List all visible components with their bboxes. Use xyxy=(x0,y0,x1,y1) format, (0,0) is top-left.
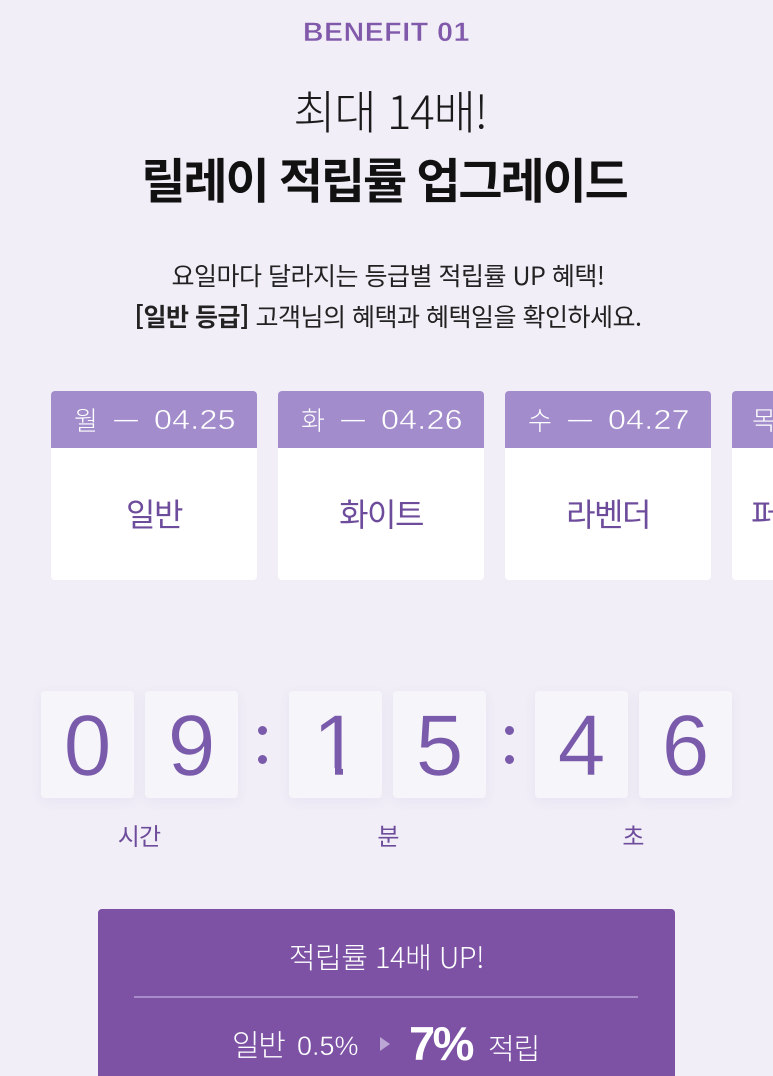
panel: monday card: — xyxy=(114,406,138,433)
title: bold line: 릴레이 적립률 업그레이드 xyxy=(141,142,627,212)
rate heading: 적립률 14배 UP! xyxy=(289,935,484,977)
panel: wednesday card xyxy=(505,391,711,580)
panel: wednesday card: 수 xyxy=(528,401,552,438)
panel: tuesday card: 화 xyxy=(301,401,325,438)
countdown: seconds digit 4: 4 xyxy=(558,698,605,794)
countdown: colon xyxy=(505,726,514,764)
description text xyxy=(135,257,641,334)
panel: wednesday card: 04.27 xyxy=(608,404,690,435)
countdown: seconds digit 6: 6 xyxy=(662,698,709,794)
description text: [일반 등급] 고객님의 혜택과 혜택일을 확인하세요. xyxy=(135,298,641,334)
countdown: minutes digit 5 xyxy=(393,691,486,798)
rate: base percent: 0.5% xyxy=(297,1031,359,1061)
panel: monday card: 04.25 xyxy=(154,404,236,435)
countdown: seconds digit 6 xyxy=(639,691,732,798)
panel: monday card: 일반 xyxy=(126,490,182,536)
countdown: seconds digit 4 xyxy=(535,691,628,798)
panel: rate upgrade box xyxy=(98,909,675,1076)
label: minutes: 분 xyxy=(377,817,399,852)
panel: tuesday card: — xyxy=(341,406,365,433)
countdown: colon xyxy=(258,726,267,764)
panel: thursday card, cropped xyxy=(732,391,773,580)
section label: BENEFIT 01: BENEFIT 01 xyxy=(303,17,470,47)
panel: tuesday card xyxy=(278,391,484,580)
description text: 요일마다 달라지는 등급별 적립률 UP 혜택! xyxy=(172,257,604,293)
panel: monday card xyxy=(51,391,257,580)
panel: monday card: 월 xyxy=(74,401,98,438)
countdown: hours digit 9 xyxy=(145,691,238,798)
rate: suffix text: 적립 xyxy=(488,1026,539,1068)
label: hours: 시간 xyxy=(118,817,160,852)
countdown: minutes digit 1 xyxy=(289,691,382,798)
panel: tuesday card: 화이트 xyxy=(339,490,423,536)
panel: wednesday card: — xyxy=(568,406,592,433)
countdown: hours digit 0 xyxy=(41,691,134,798)
title: light line: 최대 14배! xyxy=(293,77,487,143)
countdown: hours digit 0: 0 xyxy=(64,698,111,794)
icon: arrow xyxy=(380,1037,390,1051)
label: seconds: 초 xyxy=(622,817,644,852)
panel: wednesday card: 라벤더 xyxy=(566,490,650,536)
countdown: minutes digit 1: 1 xyxy=(313,698,360,794)
countdown: hours digit 9: 9 xyxy=(168,698,215,794)
countdown: minutes digit 5: 5 xyxy=(416,698,463,794)
divider line xyxy=(134,996,638,998)
rate: highlighted 7%: 7% xyxy=(409,1017,472,1070)
rate: base text: 일반 xyxy=(232,1021,285,1065)
panel: tuesday card: 04.26 xyxy=(381,404,463,435)
